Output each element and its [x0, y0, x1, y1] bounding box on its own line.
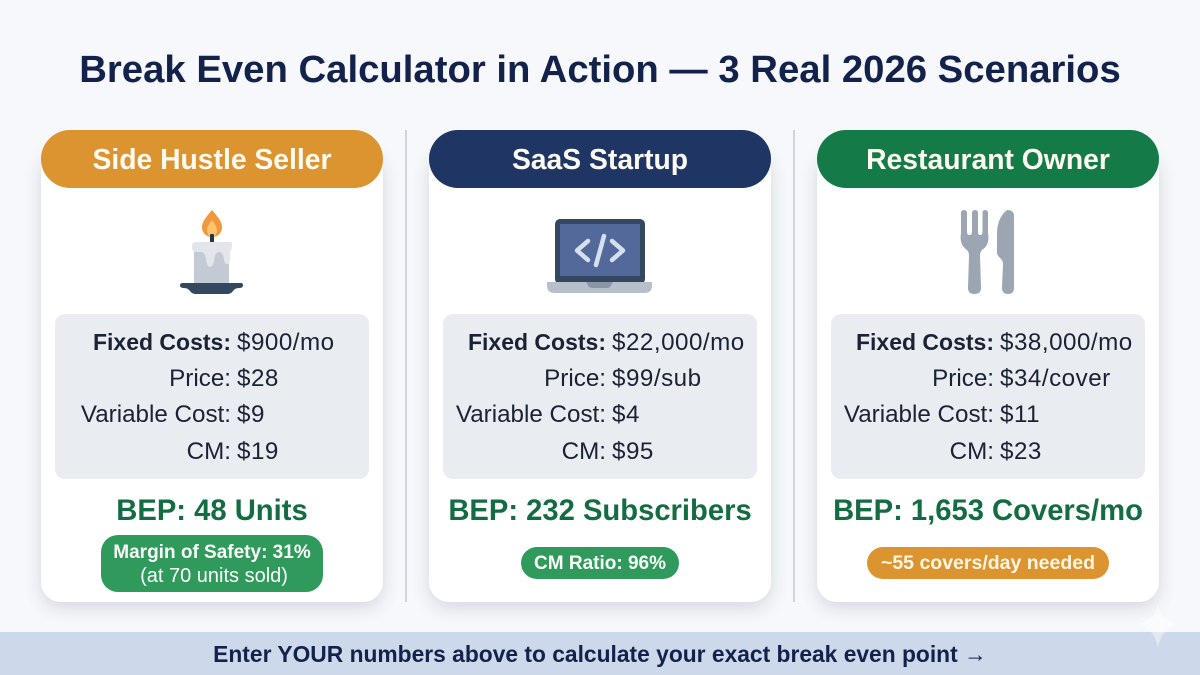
panel: saas startup [422, 130, 778, 614]
row: fixed costs: $900/mo [237, 329, 335, 356]
heading: saas startup [429, 130, 771, 188]
badge: margin of safety [101, 535, 323, 592]
icon: laptop [547, 219, 652, 293]
row: fixed costs: $38,000/mo [1000, 329, 1133, 356]
row: cm: $19 [237, 438, 279, 465]
row: cm: CM: [562, 438, 606, 465]
footer banner [0, 632, 1200, 675]
row: price: $34/cover [1000, 365, 1111, 392]
row: price: $99/sub [612, 365, 702, 392]
badge: cm ratio [521, 547, 679, 579]
row: variable cost: $4 [612, 401, 640, 428]
divider: right [793, 130, 795, 602]
icon: sparkle watermark [1151, 632, 1165, 647]
badge: margin of safety: (at 70 units sold) [140, 565, 288, 587]
heading: restaurant owner: Restaurant Owner [866, 143, 1110, 175]
row: price [544, 365, 702, 392]
icon: candle [180, 210, 243, 294]
icon: fork and knife [960, 210, 1014, 294]
row: cm: $95 [612, 438, 654, 465]
heading: side hustle seller [41, 130, 383, 188]
row: variable cost: $11 [1000, 401, 1040, 428]
row: fixed costs: Fixed Costs: [856, 329, 994, 355]
badge: margin of safety: Margin of Safety: 31% [113, 542, 311, 563]
panel: side hustle seller [34, 130, 390, 614]
row: variable cost: Variable Cost: [81, 401, 231, 428]
row: cm [950, 438, 1042, 465]
row: cm [562, 438, 654, 465]
row: variable cost: Variable Cost: [456, 401, 606, 428]
card background [429, 150, 771, 602]
row: cm: $23 [1000, 438, 1042, 465]
divider: left [405, 130, 407, 602]
badge: covers per day: ~55 covers/day needed [881, 552, 1095, 574]
info table [831, 314, 1145, 479]
row: cm: CM: [187, 438, 231, 465]
heading: restaurant owner [817, 130, 1159, 188]
row: price [932, 365, 1111, 392]
break even result: BEP: 1,653 Covers/mo [833, 495, 1143, 527]
footer banner: Enter YOUR numbers above to calculate your exact break even point → [213, 641, 987, 667]
row: price: $28 [237, 365, 279, 392]
row: price: Price: [932, 365, 994, 392]
card background [41, 150, 383, 602]
row: fixed costs: Fixed Costs: [468, 329, 606, 355]
row: cm [187, 438, 279, 465]
row: price: Price: [544, 365, 606, 392]
row: price [169, 365, 279, 392]
panel: restaurant owner [810, 130, 1166, 614]
break even result: BEP: 48 Units [116, 495, 308, 527]
row: fixed costs [93, 329, 335, 356]
heading: saas startup: SaaS Startup [512, 143, 688, 175]
row: cm: CM: [950, 438, 994, 465]
row: fixed costs [856, 329, 1133, 356]
title: Break Even Calculator in Action — 3 Real 2026 Scenarios [79, 48, 1121, 91]
row: fixed costs: Fixed Costs: [93, 329, 231, 355]
row: price: Price: [169, 365, 231, 392]
row: variable cost: $9 [237, 401, 265, 428]
row: fixed costs [468, 329, 745, 356]
card background [817, 150, 1159, 602]
break even result: BEP: 232 Subscribers [448, 495, 752, 527]
row: variable cost: Variable Cost: [844, 401, 994, 428]
info table [55, 314, 369, 479]
heading: side hustle seller: Side Hustle Seller [92, 143, 332, 175]
badge: covers per day [867, 547, 1109, 579]
info table [443, 314, 757, 479]
row: fixed costs: $22,000/mo [612, 329, 745, 356]
badge: cm ratio: CM Ratio: 96% [534, 553, 666, 574]
